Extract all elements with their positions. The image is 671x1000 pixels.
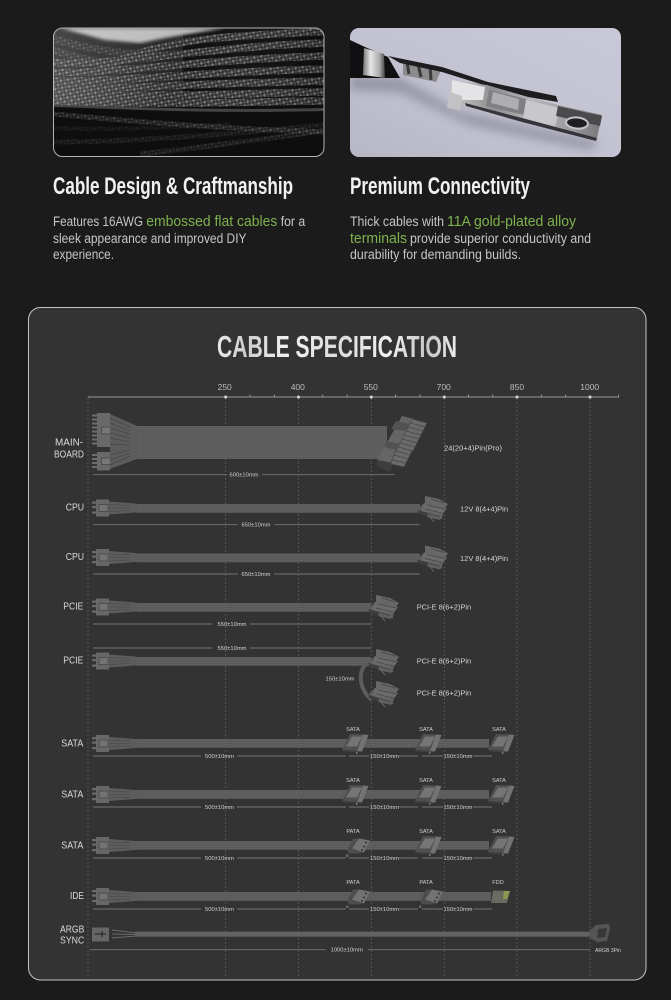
text block: cable design: embossed flat cables	[146, 214, 277, 230]
cable: SATA 1: 150±10mm	[370, 754, 399, 760]
cable: SATA 1: 150±10mm	[444, 754, 473, 760]
cable: ARGB sync: ARGB 3Pin	[595, 948, 621, 954]
photo: braided flat cables	[45, 28, 330, 157]
length axis: 700	[437, 382, 451, 392]
text block: cable design	[53, 214, 306, 262]
cable: SATA 3: 500±10mm	[205, 856, 234, 862]
cable: SATA 1	[61, 727, 515, 760]
cable: IDE: FDD	[492, 880, 504, 886]
length axis: 250	[218, 382, 232, 392]
text block: connectivity: provide superior conductivity and	[410, 231, 591, 246]
cable: CPU 2	[66, 546, 508, 578]
cable: SATA 2: 150±10mm	[444, 805, 473, 811]
cable: SATA 1: SATA	[419, 727, 433, 733]
text block: connectivity	[350, 214, 591, 262]
cable: SATA 3: SATA	[61, 840, 84, 852]
cable: SATA 2: 500±10mm	[205, 805, 234, 811]
text block: cable design: for a	[281, 214, 306, 229]
cable end	[350, 40, 400, 78]
text block: connectivity: durability for demanding builds.	[350, 247, 521, 262]
cable: CPU 2: 12V 8(4+4)Pin	[460, 554, 508, 563]
cable: SATA 1: SATA	[346, 727, 360, 733]
cable: PCIE 2	[63, 646, 471, 707]
text block: connectivity: Thick cables with	[350, 214, 444, 229]
cable: SATA 1: 500±10mm	[205, 754, 234, 760]
cable: SATA 3: 150±10mm	[444, 856, 473, 862]
cable: CPU 2: 650±10mm	[242, 572, 271, 578]
cable: SATA 2: SATA	[346, 778, 360, 784]
cable: PCIE 2: 150±10mm	[326, 676, 355, 682]
crimp collar	[363, 48, 385, 78]
length axis: 400	[291, 382, 305, 392]
text block: cable design: sleek appearance and improved DIY	[53, 231, 246, 246]
cable: main board: 600±10mm	[230, 473, 259, 479]
cable: SATA 3	[61, 829, 515, 862]
heading: cable design: Cable Design & Craftmanship	[53, 173, 293, 200]
cable: main board: BOARD	[54, 450, 84, 460]
cable: SATA 1: SATA	[61, 738, 84, 750]
photo frame: cables	[54, 28, 324, 156]
cable: SATA 2: 150±10mm	[370, 805, 399, 811]
length axis: 850	[510, 382, 524, 392]
text block: cable design: experience.	[53, 247, 114, 262]
cable: PCIE 2: PCI-E 8(6+2)Pin	[417, 688, 471, 698]
cable: SATA 2: SATA	[492, 778, 506, 784]
cable: IDE: IDE	[70, 891, 84, 902]
cable: IDE: PATA	[346, 880, 360, 886]
cable: IDE	[70, 880, 510, 913]
cable: ARGB sync	[60, 924, 621, 954]
cable: IDE: 150±10mm	[370, 907, 399, 913]
cable: PCIE 2: 550±10mm	[218, 646, 247, 652]
cable: PCIE 1: PCI-E 8(6+2)Pin	[417, 603, 471, 612]
cable: SATA 3: PATA	[346, 829, 360, 835]
cable: SATA 2	[61, 778, 515, 811]
photo: gold-plated terminal	[350, 28, 621, 157]
panel: cable specification	[28, 308, 646, 980]
black top edge	[388, 56, 558, 102]
length axis: 550	[364, 382, 378, 392]
text block: cable design: Features 16AWG	[53, 214, 143, 229]
cable: IDE: PATA	[419, 880, 433, 886]
terminal	[447, 80, 602, 138]
cable: PCIE 1: 550±10mm	[218, 622, 247, 628]
heading: connectivity: Premium Connectivity	[350, 173, 530, 200]
cable: main board: MAIN-	[55, 438, 83, 448]
cable: SATA 1: SATA	[492, 727, 506, 733]
cable: IDE: 150±10mm	[444, 907, 473, 913]
cable: SATA 3: SATA	[492, 829, 506, 835]
length axis: 1000	[580, 382, 599, 392]
cable: IDE: 500±10mm	[205, 907, 234, 913]
cable: SATA 3: 150±10mm	[370, 856, 399, 862]
cable: main board	[54, 413, 502, 479]
cable: SATA 2: SATA	[61, 790, 84, 800]
cable: CPU 1: CPU	[66, 502, 84, 514]
length axis	[88, 382, 619, 978]
cable: PCIE 1: PCIE	[63, 602, 84, 612]
cable: PCIE 2: PCIE	[63, 656, 84, 666]
text block: connectivity: terminals	[350, 231, 407, 247]
cable: CPU 1	[66, 496, 508, 529]
cable: CPU 1: 650±10mm	[242, 523, 271, 529]
contact hole	[566, 117, 588, 129]
title: CABLE SPECIFICATION	[217, 329, 457, 364]
cable: ARGB sync: ARGB	[60, 924, 85, 936]
cable: main board: 24(20+4)Pin(Pro)	[444, 444, 502, 452]
text block: connectivity: 11A gold-plated alloy	[447, 214, 577, 230]
cable: SATA 3: SATA	[419, 829, 433, 835]
cable: CPU 1: 12V 8(4+4)Pin	[460, 504, 508, 514]
cable: ARGB sync: 1000±10mm	[331, 948, 363, 954]
cable: SATA 2: SATA	[419, 778, 433, 784]
cable: ARGB sync: SYNC	[60, 936, 84, 946]
cable: CPU 2: CPU	[66, 552, 84, 563]
cable: PCIE 1	[63, 595, 471, 628]
cable: PCIE 2: PCI-E 8(6+2)Pin	[417, 656, 471, 666]
